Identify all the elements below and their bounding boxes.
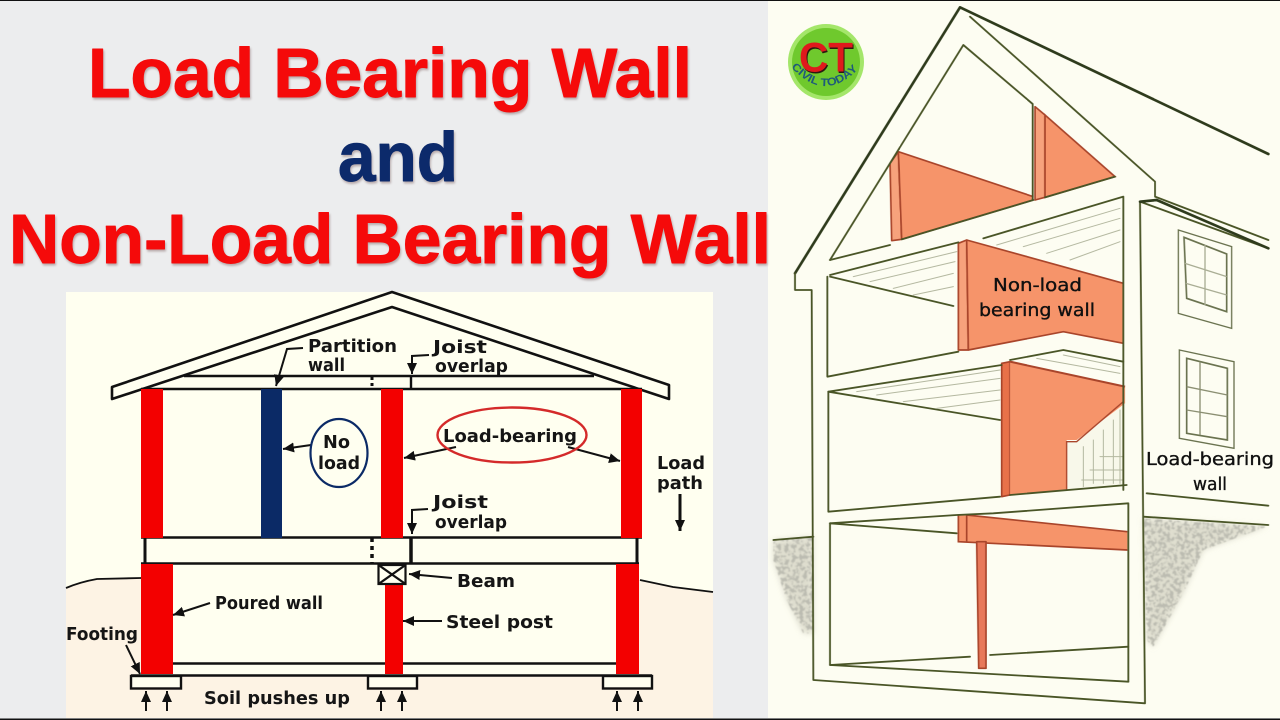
arrows: soil pushes up	[146, 691, 638, 711]
label: joist overlap top: overlap	[435, 356, 508, 377]
label: joist overlap top: Joist	[431, 337, 487, 358]
label: load-bearing: Load-bearing	[443, 426, 577, 447]
soil ground fill	[66, 578, 713, 718]
label: load path: path	[657, 473, 703, 494]
staircase	[1067, 402, 1125, 490]
arrow: load-bearing right	[568, 447, 620, 461]
arrow: poured wall	[173, 603, 210, 615]
label: joist overlap lower: overlap	[435, 512, 507, 533]
orange beam: basement	[958, 515, 1127, 550]
soil texture right	[1143, 518, 1267, 647]
label: load-bearing wall: wall	[1193, 474, 1227, 495]
orange wall: middle storey	[1002, 362, 1125, 497]
arrow: footing	[126, 645, 140, 674]
soil texture left	[773, 537, 813, 633]
no load ellipse	[310, 419, 368, 487]
ground lines	[773, 493, 1268, 540]
arrow: load path	[678, 494, 682, 531]
poured wall: lower right	[616, 564, 639, 674]
title	[9, 34, 771, 278]
label: non-load bearing wall: bearing wall	[979, 300, 1095, 321]
arrow: joist overlap lower	[412, 509, 428, 534]
title line: and: and	[338, 118, 458, 196]
title line: load bearing wall: Load Bearing Wall	[88, 34, 692, 112]
orange steel post	[977, 542, 986, 668]
load-bearing wall: upper left	[141, 389, 163, 538]
load-bearing wall: upper centre	[381, 389, 403, 538]
load-bearing ellipse	[438, 408, 586, 462]
ceiling hatching	[853, 208, 1120, 408]
beam	[378, 565, 406, 584]
label: soil pushes up: Soil pushes up	[204, 688, 350, 709]
house interior upper	[141, 389, 642, 563]
label: partition wall: Partition	[308, 336, 397, 357]
load-bearing wall: upper right	[621, 389, 642, 538]
label: steel post: Steel post	[446, 612, 553, 633]
label: footing: Footing	[66, 624, 138, 645]
arrow: joist overlap top	[412, 355, 429, 374]
ceiling joists	[131, 376, 652, 676]
arrow: steel post	[403, 620, 442, 622]
label: load-bearing wall: Load-bearing	[1146, 449, 1274, 470]
logo: Civil Today: CT	[800, 35, 854, 82]
logo: Civil Today: CT	[799, 34, 853, 80]
ground lines	[66, 578, 713, 592]
orange wall: upper storey	[958, 240, 1123, 350]
orange wall: attic left strip and face	[890, 152, 1033, 241]
panel: right cutaway house background	[768, 1, 1280, 718]
poured wall: lower left	[141, 564, 173, 674]
label: no load: load	[318, 453, 360, 474]
label: load path: Load	[657, 453, 705, 474]
steel post	[385, 583, 403, 674]
label: joist overlap lower: Joist	[431, 492, 488, 513]
window lower	[1179, 350, 1234, 448]
cutaway house drawing	[773, 7, 1268, 703]
label: beam: Beam	[457, 571, 515, 592]
logo: Civil Today: CIVIL TODAY	[792, 64, 856, 86]
arrow: beam	[409, 574, 452, 578]
label: non-load bearing wall: Non-load	[993, 275, 1082, 296]
orange wall: attic right strip and face	[1035, 107, 1115, 200]
floor and ceiling lines	[828, 177, 1128, 682]
label: poured wall: Poured wall	[215, 593, 323, 614]
label: no load: No	[323, 432, 350, 453]
arrow: partition wall	[276, 348, 303, 386]
arrow: load-bearing left	[404, 447, 456, 458]
partition wall: no load	[261, 389, 282, 538]
arrow: no load	[283, 445, 311, 449]
panel: left load path section diagram	[66, 292, 713, 718]
roof and gable lines	[795, 7, 1268, 703]
label: partition wall: wall	[308, 355, 345, 376]
window upper	[1178, 230, 1232, 328]
title line: non-load bearing wall: Non-Load Bearing Wall	[9, 200, 771, 278]
roof	[112, 292, 669, 399]
logo: Civil Today	[788, 24, 864, 100]
footings	[131, 676, 652, 688]
